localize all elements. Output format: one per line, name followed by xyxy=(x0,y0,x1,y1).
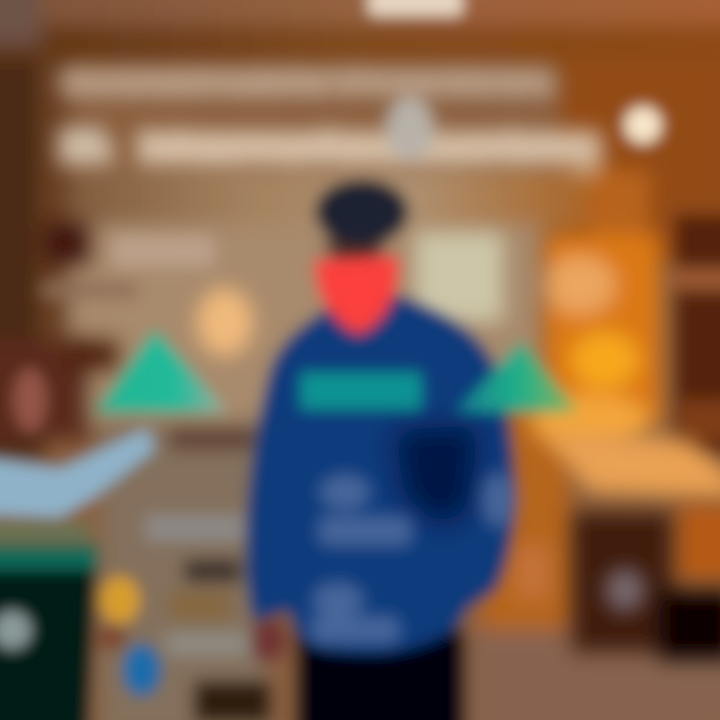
person xyxy=(246,180,514,720)
yellow ball xyxy=(100,576,140,624)
ceiling light xyxy=(368,0,463,16)
teal triangle right xyxy=(455,342,578,412)
hair xyxy=(316,180,408,244)
title text xyxy=(55,63,605,176)
neck xyxy=(327,223,383,267)
title line 2: in Manufacturing xyxy=(55,120,605,176)
legs xyxy=(298,630,463,720)
blue ball xyxy=(123,644,161,696)
shelves xyxy=(42,235,286,720)
green bin xyxy=(0,525,98,720)
red mask xyxy=(315,256,399,335)
round light xyxy=(624,106,662,144)
pale window panel xyxy=(415,232,503,322)
warm lamp glow xyxy=(197,288,253,356)
child arm and shirt xyxy=(0,428,155,518)
teal chest label xyxy=(300,372,422,410)
title line 1: Sustainable Practices xyxy=(58,63,556,105)
teal triangle left xyxy=(96,330,228,412)
sweater text xyxy=(310,472,514,644)
round icon xyxy=(386,96,434,160)
sweater shadow xyxy=(395,425,478,525)
orange glow on right wall xyxy=(530,170,660,446)
sweater xyxy=(246,296,514,654)
child head xyxy=(13,368,47,432)
table xyxy=(515,430,720,660)
dark patches at left xyxy=(45,222,118,370)
toy base xyxy=(98,628,126,648)
right dark shelves xyxy=(672,215,720,455)
child figure xyxy=(0,368,155,518)
